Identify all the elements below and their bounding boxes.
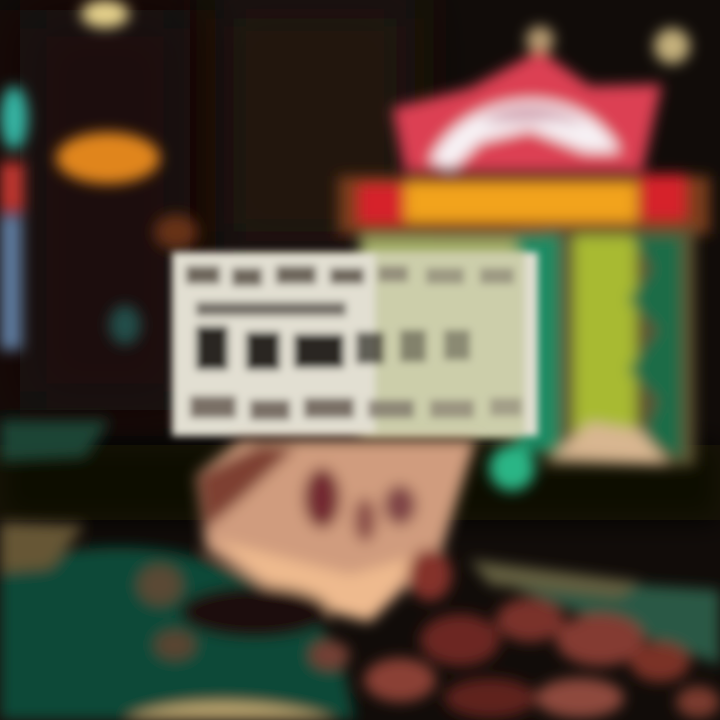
teal reflection <box>109 305 141 345</box>
blurred headline panel <box>172 250 538 436</box>
marquee bar <box>338 174 710 234</box>
green table <box>0 420 720 720</box>
dark shadow under hand <box>180 586 330 638</box>
orange wall glow <box>154 214 198 250</box>
marquee sign <box>392 50 662 172</box>
headline line 3 <box>190 396 522 420</box>
green game board <box>360 228 695 491</box>
casino chips <box>138 549 720 718</box>
headline line 2 <box>196 302 470 370</box>
hand with cards <box>196 440 476 622</box>
orange lamp <box>56 132 160 184</box>
headline line 1 <box>186 266 514 286</box>
left slot machine <box>0 86 28 350</box>
ceiling lights <box>81 0 690 64</box>
